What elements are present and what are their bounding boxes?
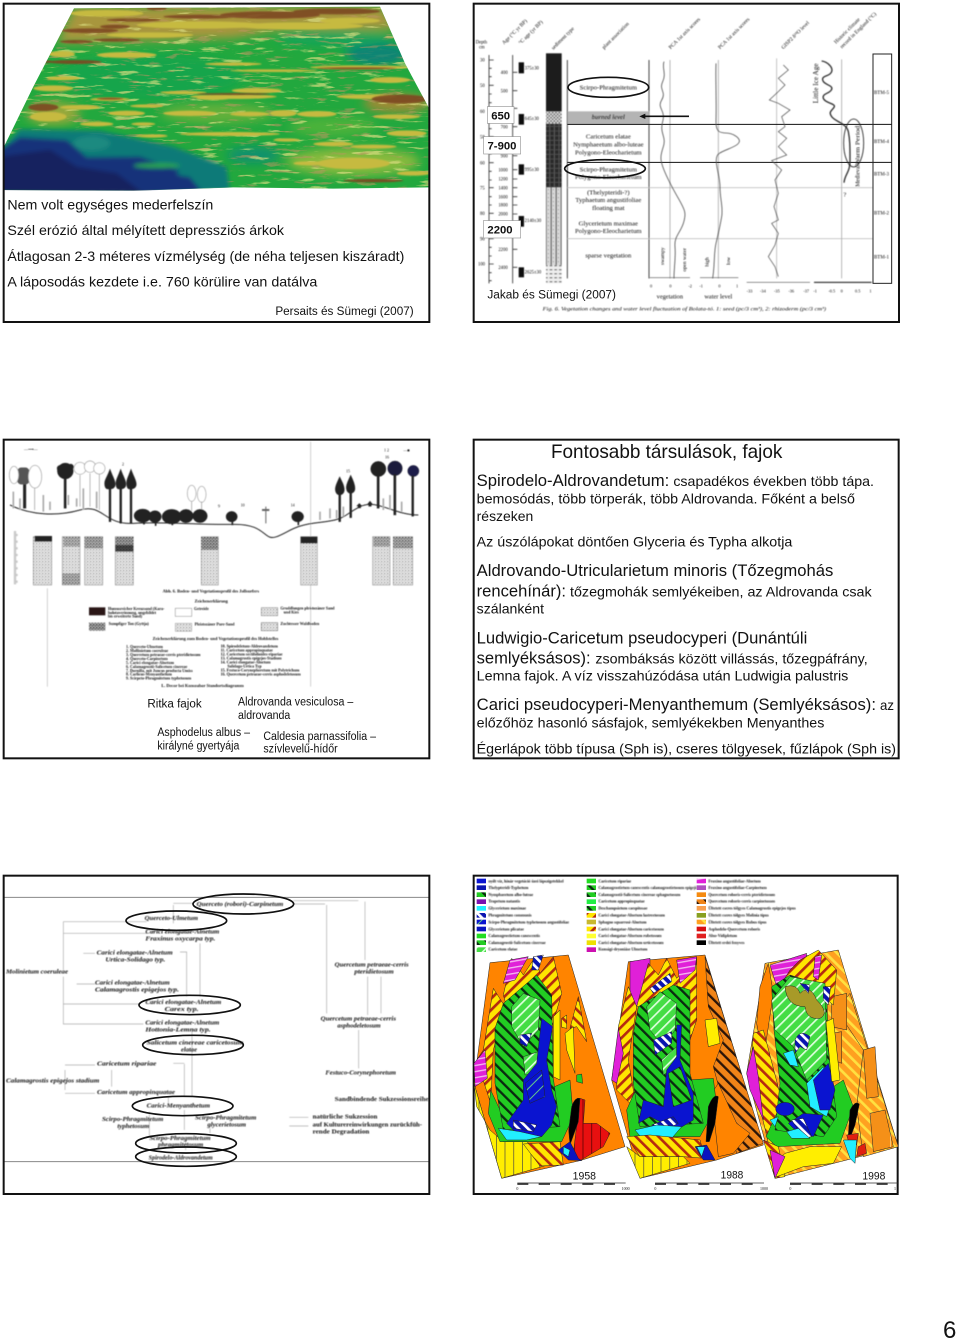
- panel border: [474, 440, 899, 758]
- map year labels and scale bars: [516, 1170, 898, 1191]
- legend and profile captions: Abb. 6. Boden- und Vegetationsprofil des Jollsurfers: [163, 589, 259, 594]
- Carici-Menyanthemum: az: [880, 697, 894, 713]
- map legend: Trapetum natantis: [488, 899, 520, 904]
- axis numbers: 58: [480, 135, 485, 140]
- cold-region overlay: lowland basin: [0, 48, 400, 193]
- depth scale: [15, 531, 18, 584]
- panel: succession diagram: [4, 876, 429, 1194]
- legend and profile captions: Salidago-Urtica Typ: [227, 663, 262, 668]
- legend and profile captions: 11. Caricetum appropinquatae: [221, 647, 273, 652]
- Carici-Menyanthemum: [477, 695, 894, 731]
- succession lines: [63, 901, 381, 1150]
- label: 7-900: [484, 137, 521, 154]
- map legend: Ültetett erdei fenyves: [708, 940, 745, 945]
- axis numbers: 1400: [498, 186, 508, 191]
- axis numbers: 80: [480, 212, 485, 217]
- map legend: Carici elongatae-Alnetum caricetosum: [598, 926, 665, 931]
- association labels: Quercetum petraeae-cerris: [335, 963, 409, 969]
- plant association labels: Typhaetum angustifoliae: [575, 197, 641, 204]
- association labels: elatae: [181, 1047, 197, 1053]
- plant association labels: floating mat: [592, 205, 625, 212]
- bottom axes: 0.5: [855, 289, 860, 294]
- Spirodelo-Aldrovandetum: [477, 471, 874, 524]
- axis numbers: 900: [501, 154, 508, 159]
- bottom axes: 0: [841, 289, 843, 294]
- bottom axes: low: [726, 257, 732, 265]
- soil columns: [33, 536, 413, 585]
- bottom axes: high: [704, 257, 710, 267]
- panel: pollen and stratigraphy chart: [474, 4, 899, 322]
- legend and profile captions: 4. Querceto-Carpinetum: [126, 656, 168, 661]
- rotated column headers: Historic climate: [833, 17, 862, 45]
- shrubs in the centre: [134, 507, 304, 526]
- scale bars: 1000: [622, 1186, 630, 1191]
- rotated column headers: °C age (yr BP): [517, 19, 545, 46]
- panel border: [4, 876, 429, 1194]
- Ludwigio-Caricetum: semlyéksásos):: [477, 648, 591, 667]
- burned level band: [568, 111, 649, 124]
- Aldrovando-Utricularietum: szálanként: [477, 601, 544, 617]
- rotated column headers: PCA 1st axis scores: [668, 17, 702, 51]
- radiocarbon date markers: 645±30: [525, 117, 540, 122]
- map legend: Thelypteridi-Typhetum: [488, 885, 529, 890]
- key text: natürliche Sukzession: [313, 1114, 378, 1120]
- legend and profile captions: Zeichenerklärung: [195, 599, 229, 604]
- bottom axes: 0: [650, 283, 652, 288]
- axis numbers: 60: [480, 110, 485, 115]
- plant association labels: Glycerietum maximae: [579, 220, 638, 227]
- Spirodelo-Aldrovandetum: csapadékos években több tápa.: [673, 473, 874, 489]
- map: 1958: [474, 955, 625, 1178]
- oval: Scirpo-Phragmitetum upper: [568, 77, 649, 97]
- key text: [313, 1097, 429, 1136]
- association labels: Calamagrostis epigejos typ.: [95, 988, 180, 994]
- label: 650: [487, 107, 514, 123]
- axis numbers: 700: [501, 125, 508, 130]
- association labels: Festuco-Corynephoretum: [325, 1070, 396, 1076]
- association labels: Carici elongatae-Alnetum: [145, 1020, 220, 1026]
- Ludwigio-Caricetum: zsombáksás között villássás, tőzegpáfrány,: [595, 650, 868, 666]
- climate period labels: Warm Period: [854, 125, 861, 165]
- Spirodelo-Aldrovandetum: részeken: [477, 508, 533, 524]
- bottom axes: 0: [718, 283, 721, 288]
- plant association labels: Scirpo-Phragmitetum: [580, 166, 638, 173]
- rotated column headers: PCA 1st axis scores: [717, 17, 751, 51]
- plant association labels: Polygono-Eleocharietum: [575, 149, 642, 156]
- axis numbers: 1000: [498, 168, 508, 173]
- axis numbers: 30: [480, 59, 485, 64]
- legend and profile captions: 14. Carici elongatae-Alnetum: [221, 659, 271, 664]
- rare species heading: Ritka fajok: [147, 696, 203, 710]
- climate period labels: [812, 63, 864, 199]
- zone column: BTM-4: [874, 140, 889, 145]
- bottom axes: 1: [736, 283, 738, 288]
- panel: terrain relief map: [0, 0, 433, 322]
- source credit: Jakab és Sümegi (2007): [487, 287, 616, 301]
- legend and profile captions: Getreide: [194, 606, 209, 611]
- oval: Scirpo-Phragmitetum lower: [565, 160, 645, 178]
- association labels: Salicetum cinereae caricetosum: [147, 1040, 244, 1046]
- arrow: burned level: [639, 114, 689, 119]
- bottom axes: -33: [747, 289, 752, 294]
- map legend: Glycerietum plicatae: [488, 926, 524, 931]
- plant association labels: Nymphaeetum albo-luteae: [573, 141, 644, 148]
- description text: Nem volt egységes mederfelszín: [7, 196, 213, 212]
- association labels: Hottonia-Lemna typ.: [144, 1027, 211, 1033]
- depth and age axes: [489, 55, 517, 283]
- small plant markers: 10: [241, 503, 245, 508]
- panel border: [474, 876, 898, 1194]
- Ludwigio-Caricetum: Ludwigio-Caricetum pseudocyperi (Dunántúli: [477, 628, 807, 647]
- scale bars: 0: [789, 1186, 791, 1191]
- axis numbers: 100: [478, 263, 486, 268]
- zone column: BTM-5: [874, 91, 889, 96]
- species: Caldesia: Caldesia parnassifolia –: [263, 729, 376, 743]
- panel border: [474, 4, 899, 322]
- rotated column headers: Age (°C yr BP): [500, 18, 529, 46]
- plant association labels: Caricetum elatae: [586, 134, 631, 141]
- association labels: Caricetum appropinquatae: [97, 1090, 175, 1096]
- bottom axes: -1: [699, 283, 703, 288]
- plant association labels: Scirpo-Phragmitetum: [580, 84, 638, 91]
- bottom axes: swampy: [660, 247, 666, 265]
- axis numbers: 50: [480, 84, 485, 89]
- year: 1998: 1998: [862, 1170, 885, 1182]
- small plant markers: 16: [385, 454, 389, 459]
- map legend: Quercetum roboris-cerris pteridietosum: [708, 892, 776, 897]
- year: 1958: 1958: [573, 1170, 596, 1182]
- map legend: Scirpo-Phragmitetum typhetosum angustifoliae: [488, 919, 569, 924]
- scale bars: [516, 1183, 898, 1191]
- species: Asphodelus: [157, 725, 250, 752]
- bottom axes: -2: [688, 283, 692, 288]
- Carici-Menyanthemum: előzőhöz hasonló sásfajok, semlyékekben Menyanthes: [477, 715, 824, 731]
- Spirodelo-Aldrovandetum: bemosódás, több törperák, több Aldrovanda. Főként a belső: [477, 491, 855, 507]
- association labels: Scirpo-Phragmitetum: [149, 1136, 211, 1142]
- Aldrovando-Utricularietum: Aldrovando-Utricularietum minoris (Tőzegmohás: [477, 561, 833, 580]
- key text: rende Degradation: [313, 1130, 370, 1136]
- map legend: Asphodelo-Quercetum roboris: [708, 926, 761, 931]
- map legend: Fraxino angustifoliae-Carpinetum: [708, 885, 767, 890]
- radiocarbon date markers: [519, 62, 542, 277]
- description text: Átlagosan 2-3 méteres vízmélység (de néha teljesen kiszáradt): [7, 248, 404, 264]
- species: Asphodelus: királyné gyertyája: [157, 738, 240, 752]
- figure caption: Fig. 6. Vegetation changes and water level fluctuation of Bolata-tó. 1: seed (pc/3 cm³), 2: rhizoderm (pc/3 cm³): [542, 305, 826, 312]
- zone column: [873, 54, 892, 283]
- map legend: Fraxino angustifoliae-Alnetum: [708, 878, 761, 883]
- scale bars: 1: [894, 1186, 896, 1191]
- association labels: Calamagrostis epigejos stadium: [6, 1078, 100, 1084]
- map legend: Caricetum elatae: [488, 947, 518, 952]
- legend and profile captions: Sumpfiger Ton (Gyttja): [109, 621, 149, 626]
- association labels: Querceto-Ulmetum: [145, 916, 198, 922]
- map: 1988: [612, 955, 763, 1178]
- rotated column headers: GISP2 δ¹⁸O level: [781, 20, 811, 51]
- profile drawing: [9, 442, 419, 688]
- sediment column: [546, 53, 562, 283]
- rotated column headers: record in England (°C): [838, 11, 878, 50]
- plant association labels: Polygono-Eleocharietum: [575, 174, 642, 181]
- label: 2200: 2200: [487, 224, 513, 236]
- label: 650: 650: [491, 110, 510, 122]
- bottom axes: open water: [682, 248, 688, 272]
- legend and profile captions: Pleistozäner Pure-Sand: [195, 621, 235, 626]
- legend and profile captions: 7. Dornilla, mit Juncus producta Umiss: [126, 668, 193, 673]
- frame rules: [4, 897, 429, 1162]
- right trees: [335, 461, 419, 522]
- plant association labels: [573, 84, 644, 260]
- panel: main plant associations text: [474, 440, 899, 758]
- bottom axes: 0: [669, 283, 672, 288]
- label: 7-900: 7-900: [488, 141, 516, 153]
- map legend: Carici elongatae-Alnetum rubetosum: [598, 933, 662, 938]
- bottom axes: -34: [760, 289, 767, 294]
- association labels: Carici elongatae-Alnetum: [97, 951, 173, 957]
- legend and profile captions: Humusreicher Kreuzsand (Kara-: [108, 606, 165, 611]
- legend and profile captions: [108, 589, 335, 688]
- axis numbers: 2000: [498, 213, 508, 218]
- legend and profile captions: 3. Querretum petraeae-cerris pteridietosum: [126, 652, 201, 657]
- legend and profile captions: 8. Carlicus-Menyanthetum: [126, 672, 172, 677]
- association labels: Quercetо (robori)-Carpinetum: [197, 901, 284, 908]
- heading: Fontosabb társulások, fajok: [551, 442, 783, 463]
- brown ridge crests: [28, 6, 428, 182]
- legend and profile captions: 2. Mollinietum coeruleae: [126, 648, 168, 653]
- species: Asphodelus: Asphodelus albus –: [157, 725, 250, 739]
- sharp zone lines: [567, 124, 892, 162]
- climate period labels: Little Ice Age: [812, 63, 820, 103]
- bottom axes: -0.5: [828, 289, 835, 294]
- map legend: Caricetum ripariae: [598, 878, 631, 883]
- species: Aldrovanda: [238, 695, 354, 722]
- map legend: Phragmitetum communis: [488, 912, 532, 917]
- small plant markers: 1 2: [384, 448, 389, 453]
- scale bars: 0: [516, 1186, 518, 1191]
- floating mats note: Az úszólápokat döntően Glyceria és Typha alkotja: [477, 534, 793, 550]
- rotated column headers: Depth: [476, 40, 488, 45]
- legend and profile captions: Zuchtesser Waldboden: [280, 621, 320, 626]
- axis numbers: 1800: [498, 204, 508, 209]
- axis numbers: 2200: [498, 248, 508, 253]
- rotated column headers: cm: [479, 46, 485, 51]
- zone column: BTM-2: [874, 212, 889, 217]
- plant association labels: sparse vegetation: [585, 253, 632, 260]
- curves: [660, 61, 850, 278]
- legend and profile captions: 5. Carici elongatae-Alnetum: [126, 660, 175, 665]
- year: 1988: 1988: [721, 1170, 743, 1182]
- association labels: Scirpo-Phragmitetum: [195, 1115, 257, 1121]
- key text: auf Kulturereinwirkungen zurückfüh-: [313, 1122, 422, 1128]
- association labels: glycerietosum: [206, 1122, 246, 1128]
- legend and profile captions: Gruddlungen pleistozäner Sand: [280, 606, 335, 611]
- axis numbers: [478, 59, 508, 271]
- Ludwigio-Caricetum: Lemna fajok. A víz visszahúzódása után Ludwigia palustris: [477, 668, 848, 684]
- association labels: Carici elongatae-Alnetum: [145, 929, 220, 935]
- map: 1998: [747, 950, 898, 1178]
- Aldrovando-Utricularietum: [477, 561, 873, 617]
- gridlines: [567, 58, 873, 278]
- bottom axes: -37: [803, 289, 810, 294]
- small plant markers: 15: [346, 468, 350, 473]
- map legend: Calamagrostietum canescentis calamagrostietosum epigeji: [598, 885, 697, 890]
- axis numbers: 500: [501, 90, 508, 95]
- map legend: Kunsági-dryoniáse Ulmetum: [598, 947, 648, 952]
- association labels: Caricetum ripariae: [97, 1062, 157, 1068]
- climate period labels: Medieval: [854, 165, 861, 187]
- map legend: nyílt víz, hínár vegetáció üzei lápszigetekkel: [488, 878, 565, 883]
- radiocarbon date markers: 2140±30: [525, 219, 542, 224]
- legend and profile captions: 10. Spirodeletum-Aldrovandetum: [221, 643, 279, 648]
- plant association labels: (Thelypteridi-?): [587, 189, 630, 196]
- species: Caldesia: szívlevelű-hídőr: [263, 741, 338, 755]
- description text: A láposodás kezdete i.e. 760 körülire van datálva: [7, 273, 318, 289]
- ground line: [10, 504, 418, 538]
- description text: [7, 196, 404, 289]
- zone column: BTM-3: [874, 172, 889, 177]
- climate period labels: ?: [843, 192, 846, 199]
- highlight ovals: [126, 894, 294, 1166]
- small plant markers: 2: [122, 462, 124, 467]
- key text: Sandbindende Sukzessionsreihe: [335, 1097, 429, 1103]
- map legend: Alno-Vidipletum: [708, 933, 738, 938]
- legend and profile captions: 15. Festuco-Corynephoretum mit Polytrichum: [221, 667, 300, 672]
- panel border: [4, 440, 429, 758]
- association labels: Carici elongatae-Alnetum: [95, 981, 170, 987]
- association labels: phragmitetosum: [157, 1143, 204, 1149]
- legend: [89, 607, 278, 631]
- Ludwigio-Caricetum: [477, 628, 868, 684]
- map legend: Glycerietum maximae: [488, 906, 526, 911]
- legend and profile captions: 1. Querceto-Ulmetum: [126, 644, 164, 649]
- panel: vegetation maps: [474, 876, 898, 1194]
- map legend: Ültetett cseres tölgyes Rubus típus: [708, 919, 767, 924]
- association labels: Molinietum coeruleae: [5, 969, 68, 975]
- scale bars: 0: [654, 1186, 656, 1191]
- axis numbers: 1600: [498, 195, 508, 200]
- scale bars: 1000: [760, 1186, 768, 1191]
- axis numbers: 400: [501, 71, 508, 76]
- legend and profile captions: 13. Calamagrostis epigejos-Stadium: [221, 655, 282, 660]
- map legend: Carici elongatae-Alnetum urticetosum: [598, 940, 664, 945]
- association labels: Urtica-Solidago typ.: [105, 958, 166, 964]
- legend and profile captions: 16. Quercetum petraeae-cerris asphodeletosum: [221, 672, 301, 677]
- small plant markers: 9: [218, 504, 220, 509]
- small plant markers: —⟶—: [23, 447, 39, 452]
- association labels: Spirodelo-Aldrovandetum: [149, 1155, 213, 1161]
- association labels: Carici elongatae-Alnetum: [145, 1000, 222, 1006]
- map legend: Ültetett cseres tölgyes Calamagrostis epigejos típus: [708, 906, 796, 911]
- alder swamp note: Égerlápok több típusa (Sph is), cseres tölgyesek, fűzlápok (Sph is): [477, 741, 896, 757]
- small plant markers: [23, 447, 410, 509]
- small plant markers: —■: [402, 448, 410, 453]
- legend and profile captions: 9. Scirpeto-Phragmitetum typhetosum: [126, 676, 192, 681]
- bottom axes: [649, 247, 872, 300]
- map legend: [477, 878, 796, 952]
- axis numbers: 60: [480, 161, 485, 166]
- map legend: Ültetett cseres tölgyes Molinia típus: [708, 912, 769, 917]
- bottom axes: -1: [813, 289, 817, 294]
- outline trees: [9, 461, 206, 511]
- species: Caldesia: [263, 729, 376, 755]
- radiocarbon date markers: 2625±30: [525, 270, 542, 275]
- rotated column headers: plant association: [601, 21, 631, 51]
- panel border: [4, 4, 429, 322]
- description text: Szél erózió által mélyített depressziós árkok: [7, 222, 285, 238]
- association labels: Quercetum petraeae-cerris: [321, 1017, 397, 1023]
- Carici-Menyanthemum: Carici pseudocyperi-Menyanthemum (Semlyéksásos):: [477, 695, 876, 714]
- bottom axes: 1: [869, 289, 872, 294]
- map legend: Quercetum roboris-cerris carpinetosum: [708, 899, 776, 904]
- association labels: typhetosum: [117, 1124, 150, 1130]
- left trees: [17, 463, 136, 523]
- scan fold lines: [47, 442, 311, 687]
- legend and profile captions: Zeichenerklärung zum Boden- und Vegetationsprofil des Hohlstelles: [153, 636, 279, 641]
- legend and profile captions: bolotaverinnung, ungebildet: [108, 610, 157, 615]
- legend and profile captions: L. Decor bei Kunszabar Standortsdiagramm: [161, 683, 244, 688]
- species: Aldrovanda: aldrovanda: [238, 708, 291, 722]
- zone column: BTM-1: [874, 256, 889, 261]
- legend and profile captions: 12. Caricetum sectifolioides-ripariae: [221, 651, 283, 656]
- axis numbers: 75: [480, 186, 485, 191]
- bottom axes: -36: [788, 289, 795, 294]
- label: 2200: [483, 221, 521, 238]
- association labels: Scirpo-Phragmitetum: [102, 1117, 164, 1123]
- radiocarbon date markers: 995±30: [525, 168, 540, 173]
- map legend: Carici elongatae-Alnetum lastreetosum: [598, 912, 666, 917]
- radiocarbon date markers: 375±30: [525, 66, 540, 71]
- legend and profile captions: bis erweiterte Sand): [108, 614, 143, 619]
- axis numbers: 2400: [498, 266, 508, 271]
- small plant markers: 14: [291, 503, 295, 508]
- association labels: Carici-Menyanthetum: [147, 1103, 210, 1109]
- map legend: Caricetum appropinquatae: [598, 899, 645, 904]
- map legend: Sphagno squarrosi-Alnetum: [598, 919, 647, 924]
- Spirodelo-Aldrovandetum: Spirodelo-Aldrovandetum:: [477, 471, 669, 490]
- map legend: Deschampsietum caespitosae: [598, 906, 648, 911]
- bottom axes: water level: [704, 293, 733, 300]
- association labels: pteridietosum: [353, 969, 394, 975]
- rotated column headers: sediment type: [551, 26, 576, 51]
- axis numbers: 1200: [498, 178, 508, 183]
- bottom axes: vegetation: [657, 293, 684, 300]
- source credit: Persaits és Sümegi (2007): [275, 304, 414, 318]
- association labels: asphodeletosum: [337, 1023, 381, 1029]
- rotated column headers: [476, 11, 878, 51]
- map legend: Calamagrostii-Salicetum cinereae sphagnetosum: [598, 892, 681, 897]
- panel: soil and vegetation profile: [4, 440, 429, 758]
- chart body: [476, 11, 878, 283]
- bottom axes: -35: [774, 289, 780, 294]
- legend and profile captions: und Kies: [284, 609, 299, 614]
- species: Aldrovanda: Aldrovanda vesiculosa –: [238, 695, 354, 709]
- plant association labels: Polygono-Eleocharietum: [575, 228, 642, 235]
- plant association labels: burned level: [592, 114, 625, 121]
- Aldrovando-Utricularietum: tőzegmohák semlyékeiben, az Aldrovanda csak: [570, 584, 873, 600]
- terrain image: [0, 0, 433, 200]
- map legend: Calamagrostii-Salicetum cinereae: [488, 940, 546, 945]
- legend and profile captions: 6. Calamagrostii-Salicetum cinereae: [126, 664, 187, 669]
- axis numbers: 90: [480, 237, 485, 242]
- map legend: Calamagrostietum canescentis: [488, 933, 540, 938]
- yellow ridges: [30, 10, 430, 176]
- understory vegetation: [13, 488, 402, 520]
- association labels: Fraxinus oxycarpa typ.: [145, 936, 216, 942]
- Aldrovando-Utricularietum: rencehínár):: [477, 582, 566, 601]
- association labels: [5, 901, 409, 1161]
- map legend: Nymphaeetum albo-luteae: [488, 892, 533, 897]
- association labels: Carex typ.: [165, 1007, 199, 1013]
